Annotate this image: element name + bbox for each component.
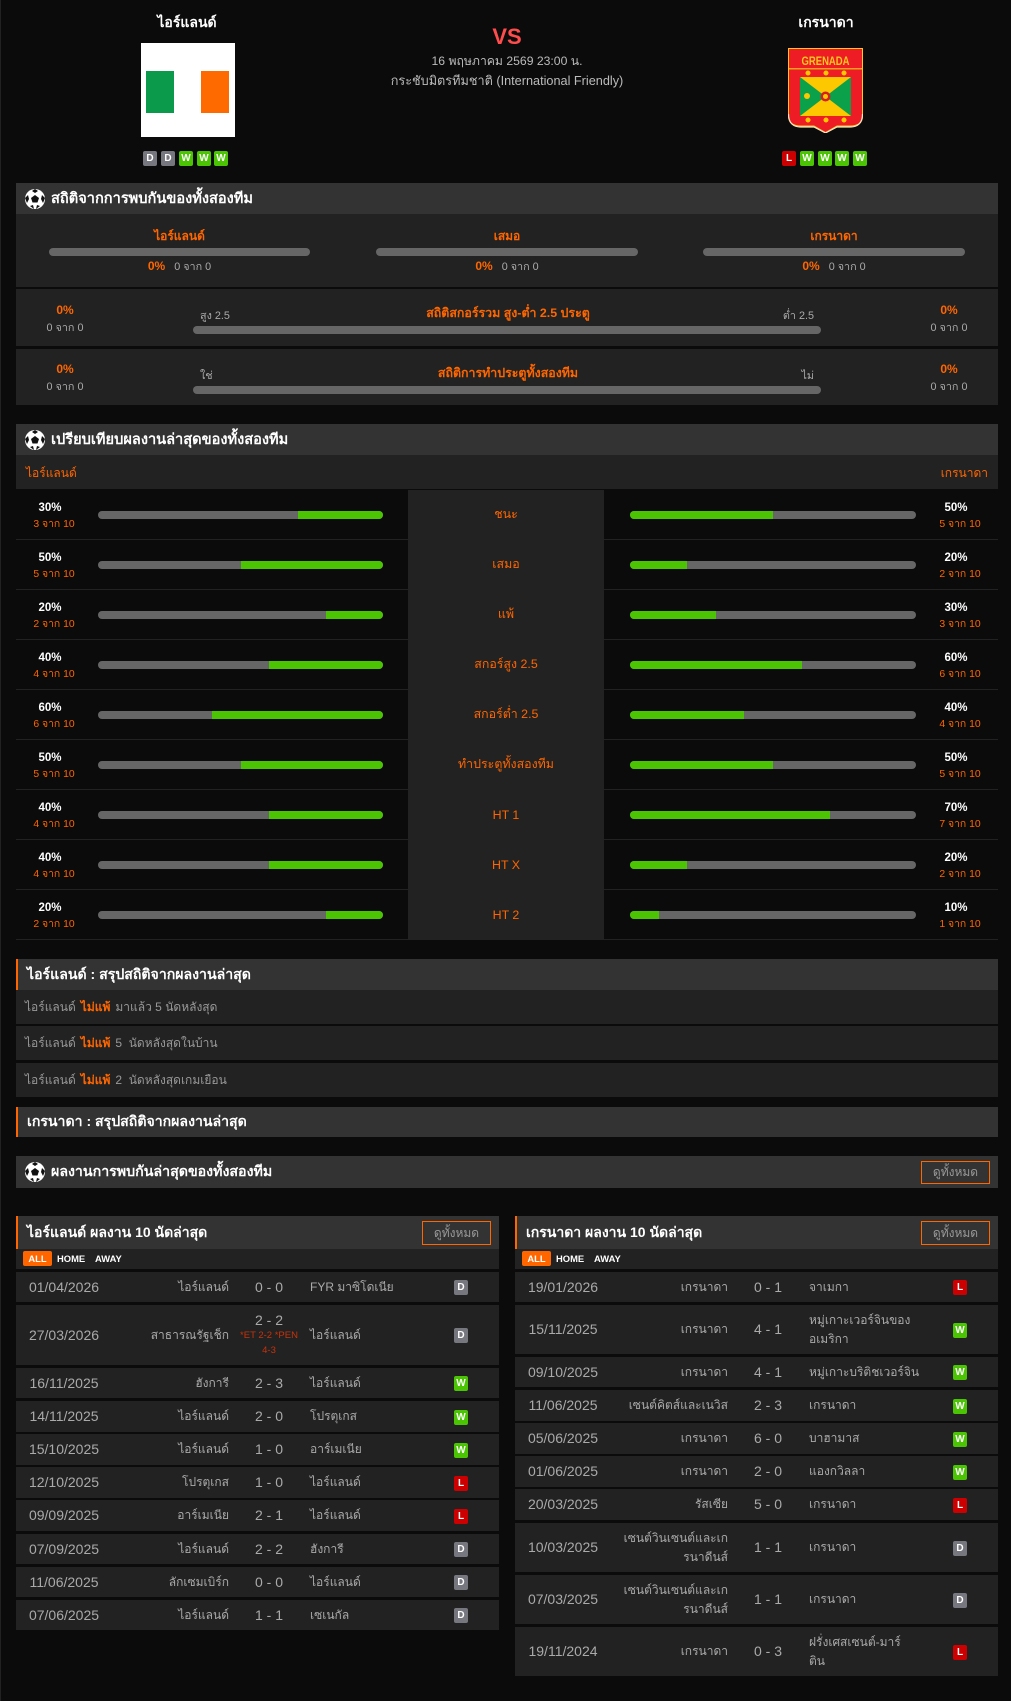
match row: Grenada 7: รัสเซีย xyxy=(695,1497,728,1511)
match row: Grenada 2: W xyxy=(955,1324,965,1336)
comparison row: HT 2: HT 2 xyxy=(493,908,519,922)
comparison row: over 2.5: 4 จาก 10 xyxy=(33,669,75,680)
form badges: Ireland xyxy=(143,151,228,166)
match row: Ireland 3: W xyxy=(456,1378,466,1389)
comparison row: HT 1: 7 จาก 10 xyxy=(939,819,981,830)
comparison row: losses: แพ้ xyxy=(498,607,514,621)
heading: recent form comparison: เปรียบเทียบผลงานล่าสุดของทั้งสองทีม xyxy=(51,432,288,448)
match row: Grenada 8: D xyxy=(956,1542,964,1554)
match row: Ireland 10: เซเนกัล xyxy=(310,1608,349,1622)
panel: over under stats: 0% xyxy=(940,303,958,317)
match row: Grenada 4: 11/06/2025 xyxy=(528,1397,598,1413)
panel: both teams to score stats: 0 จาก 0 xyxy=(47,380,83,392)
match row: Ireland 8: ฮังการี xyxy=(310,1542,344,1556)
match row: Grenada 1: L xyxy=(957,1282,963,1293)
comparison row: HT X: 20% xyxy=(944,852,968,864)
match row: Grenada 8: 1 - 1 xyxy=(754,1539,782,1555)
match row: Ireland 1: 0 - 0 xyxy=(255,1278,283,1294)
comparison row: draws: เสมอ xyxy=(492,557,520,571)
comparison row: draws xyxy=(16,540,998,590)
comparison row: draws: 50% xyxy=(38,552,62,564)
button: view all: ดูทั้งหมด xyxy=(434,1226,479,1240)
summary line 1: ไม่แพ้ xyxy=(81,1000,110,1014)
match row: Grenada 10: เกรนาดา xyxy=(681,1644,728,1658)
left edge line xyxy=(0,0,1,1701)
match row: Grenada 2: 4 - 1 xyxy=(754,1321,782,1337)
match row: Grenada 9 xyxy=(515,1575,998,1624)
match row: Grenada 4: เกรนาดา xyxy=(809,1398,856,1412)
comparison row: both teams score: 5 จาก 10 xyxy=(33,769,75,780)
form badges: Grenada xyxy=(782,151,867,166)
comparison row: under 2.5: สกอร์ต่ำ 2.5 xyxy=(474,707,538,721)
icon: soccer ball xyxy=(25,430,45,450)
panel: both teams to score stats: ใช่ xyxy=(200,370,213,382)
comparison row: wins: ชนะ xyxy=(494,507,518,521)
column: draws: เสมอ xyxy=(494,228,520,242)
panel: over under stats xyxy=(16,289,998,346)
match row: Ireland 8: D xyxy=(457,1544,465,1555)
icon: Grenada crest: GRENADA xyxy=(802,56,850,68)
match row: Grenada 2 xyxy=(515,1305,998,1354)
comparison row: over 2.5: 6 จาก 10 xyxy=(939,669,981,680)
match row: Grenada 3: W xyxy=(955,1367,965,1378)
comparison row: under 2.5: 4 จาก 10 xyxy=(939,719,981,730)
match row: Grenada 3: เกรนาดา xyxy=(681,1364,728,1378)
match row: Grenada 7: L xyxy=(957,1500,963,1510)
heading: Grenada last 10: เกรนาดา ผลงาน 10 นัดล่าสุด xyxy=(526,1224,702,1240)
comparison row: over 2.5 xyxy=(16,640,998,690)
column: Grenada wins xyxy=(703,228,965,273)
summary line 3: ไม่แพ้ xyxy=(81,1072,110,1086)
comparison row: under 2.5: 60% xyxy=(38,702,62,714)
team labels row xyxy=(16,455,998,489)
match row: Grenada 4: 2 - 3 xyxy=(754,1397,782,1413)
comparison row: losses: 30% xyxy=(944,602,968,614)
match row: Ireland 6: ไอร์แลนด์ xyxy=(310,1475,361,1489)
match row: Grenada 2: เกรนาดา xyxy=(681,1322,728,1336)
match row: Grenada 9: เซนต์วินเซนต์และเก xyxy=(624,1582,728,1596)
form badges: Ireland: W xyxy=(181,153,191,164)
match row: Grenada 9: 1 - 1 xyxy=(754,1591,782,1607)
form badges: Grenada: W xyxy=(802,153,812,164)
column: draws: 0% xyxy=(475,259,493,273)
match row: Grenada 9: D xyxy=(956,1594,964,1606)
match row: Ireland 2: 27/03/2026 xyxy=(29,1326,99,1342)
match row: Ireland 9: 0 - 0 xyxy=(255,1574,283,1590)
button: view all xyxy=(921,1161,990,1184)
tabs: Ireland filter xyxy=(16,1249,499,1269)
summary line 2 xyxy=(16,1026,998,1060)
match row: Grenada 5 xyxy=(515,1423,998,1454)
match row: Grenada 10: L xyxy=(957,1646,963,1658)
match row: Grenada 1: เกรนาดา xyxy=(681,1280,728,1294)
comparison row: HT 1: 70% xyxy=(944,802,968,814)
form badges: Ireland: D xyxy=(164,153,172,164)
match row: Ireland 2: ไอร์แลนด์ xyxy=(310,1328,361,1342)
column: Grenada wins: 0% xyxy=(802,259,820,273)
match row: Grenada 3: หมู่เกาะบริติชเวอร์จิน xyxy=(809,1364,919,1378)
match row: Ireland 3: 2 - 3 xyxy=(255,1374,283,1390)
heading: head to head stats: สถิติจากการพบกันของทั้งสองทีม xyxy=(51,191,253,207)
match row: Ireland 8: 2 - 2 xyxy=(255,1540,283,1556)
match row: Ireland 2: *ET 2-2 *PEN xyxy=(240,1330,298,1340)
match row: Ireland 3: ฮังการี xyxy=(195,1376,229,1390)
comparison row: wins: 50% xyxy=(944,502,968,514)
tabs: Grenada filter: AWAY xyxy=(594,1253,621,1264)
match row: Ireland 8: ไอร์แลนด์ xyxy=(178,1542,229,1556)
panel: over under stats: ต่ำ 2.5 xyxy=(783,310,814,322)
form badges: Ireland: W xyxy=(199,153,209,164)
comparison row: both teams score: 5 จาก 10 xyxy=(939,769,981,780)
comparison row: HT 1 xyxy=(16,790,998,840)
match row: Grenada 2: หมู่เกาะเวอร์จินของ xyxy=(809,1312,910,1326)
form badges: Grenada: L xyxy=(786,153,792,164)
match row: Ireland 9: ไอร์แลนด์ xyxy=(310,1574,361,1588)
heading: Grenada summary: เกรนาดา : สรุปสถิติจากผลงานล่าสุด xyxy=(27,1113,247,1129)
column: Grenada wins: 0 จาก 0 xyxy=(829,260,866,272)
match row: Grenada 5: เกรนาดา xyxy=(681,1431,728,1445)
match row: Grenada 5: 05/06/2025 xyxy=(528,1430,598,1446)
match row: Grenada 9: เกรนาดา xyxy=(809,1592,856,1606)
comparison row: HT 2: 1 จาก 10 xyxy=(939,919,981,930)
panel: both teams to score stats: 0% xyxy=(56,362,74,376)
comparison row: HT 2: 10% xyxy=(944,902,968,914)
match row: Ireland 7 xyxy=(16,1500,499,1531)
comparison row: losses: 3 จาก 10 xyxy=(939,619,981,630)
panel: over under stats: 0% xyxy=(56,303,74,317)
panel: over under stats: 0 จาก 0 xyxy=(931,322,967,334)
match row: Ireland 4: โปรตุเกส xyxy=(310,1409,357,1423)
comparison row: wins: 30% xyxy=(38,502,62,514)
match row: Ireland 5: W xyxy=(456,1444,466,1456)
match row: Ireland 9 xyxy=(16,1567,499,1597)
comparison row: under 2.5: 40% xyxy=(944,702,968,714)
match row: Ireland 5: 15/10/2025 xyxy=(29,1441,99,1457)
comparison row: both teams score: 50% xyxy=(38,752,62,764)
match row: Grenada 3 xyxy=(515,1357,998,1387)
tabs: Ireland filter: ALL xyxy=(28,1253,47,1264)
match row: Grenada 7: เกรนาดา xyxy=(809,1497,856,1511)
form badges: Grenada: W xyxy=(855,153,865,164)
comparison row: HT 1: 40% xyxy=(38,802,62,814)
comparison row: wins xyxy=(16,490,998,540)
match row: Grenada 1 xyxy=(515,1272,998,1302)
heading: recent form comparison xyxy=(16,424,998,455)
comparison row: over 2.5: สกอร์สูง 2.5 xyxy=(474,657,538,671)
match row: Grenada 7 xyxy=(515,1489,998,1520)
match row: Grenada 10: 0 - 3 xyxy=(754,1643,782,1659)
comparison row: HT X: 4 จาก 10 xyxy=(33,869,75,880)
tabs: Grenada filter xyxy=(515,1249,998,1269)
comparison row: losses: 2 จาก 10 xyxy=(33,619,75,630)
panel: both teams to score stats: สถิติการทำประตูทั้งสองทีม xyxy=(438,366,578,380)
form badges: Ireland: D xyxy=(146,153,154,164)
match row: Ireland 5 xyxy=(16,1434,499,1465)
column: Ireland wins: 0 จาก 0 xyxy=(174,260,211,272)
comparison row: draws: 5 จาก 10 xyxy=(33,569,75,580)
match row: Ireland 6 xyxy=(16,1467,499,1498)
match row: Grenada 5: W xyxy=(955,1434,965,1444)
match row: Ireland 9: ลักเซมเบิร์ก xyxy=(169,1574,229,1588)
tabs: Grenada filter: ALL xyxy=(527,1253,546,1264)
match row: Ireland 1: ไอร์แลนด์ xyxy=(178,1280,229,1294)
match row: Grenada 6: แองกวิลลา xyxy=(809,1464,865,1478)
match row: Grenada 8: 10/03/2025 xyxy=(528,1539,598,1555)
panel: both teams to score stats xyxy=(16,349,998,405)
heading: Ireland last 10 xyxy=(16,1216,499,1249)
tabs: Ireland filter: HOME xyxy=(57,1253,85,1264)
match row: Grenada 1: 0 - 1 xyxy=(754,1278,782,1294)
heading: Ireland last 10: ไอร์แลนด์ ผลงาน 10 นัดล่าสุด xyxy=(27,1224,207,1240)
form badges: Ireland: W xyxy=(216,153,226,164)
panel: head to head results xyxy=(16,214,998,287)
comparison row: both teams score: ทำประตูทั้งสองทีม xyxy=(458,757,554,771)
panel: over under stats: 0 จาก 0 xyxy=(47,322,83,334)
match row: Ireland 10: D xyxy=(457,1610,465,1621)
icon: soccer ball xyxy=(25,1162,45,1182)
team labels row: เกรนาดา xyxy=(941,466,988,480)
match row: Grenada 4: W xyxy=(955,1400,965,1412)
match row: Grenada 10: 19/11/2024 xyxy=(528,1643,598,1659)
icon: soccer ball xyxy=(25,189,45,209)
match row: Ireland 6: 1 - 0 xyxy=(255,1474,283,1490)
match row: Grenada 7: 5 - 0 xyxy=(754,1496,782,1512)
heading: Ireland summary xyxy=(16,959,998,990)
match row: Grenada 6: W xyxy=(955,1466,965,1478)
match row: Ireland 4: 14/11/2025 xyxy=(29,1408,99,1424)
comparison row: HT 1: 4 จาก 10 xyxy=(33,819,75,830)
team labels row: ไอร์แลนด์ xyxy=(26,466,77,480)
summary line 2: ไม่แพ้ xyxy=(81,1036,110,1050)
match row: Ireland 2: D xyxy=(457,1330,465,1341)
match row: Grenada 10: ฝรั่งเศสเซนต์-มาร์ xyxy=(809,1634,901,1648)
column: draws: 0 จาก 0 xyxy=(502,260,539,272)
match row: Grenada 9: รนาดีนส์ xyxy=(683,1602,728,1616)
comparison row: HT X: 2 จาก 10 xyxy=(939,869,981,880)
match row: Ireland 3 xyxy=(16,1368,499,1398)
match row: Grenada 4: เซนต์คิตส์และเนวิส xyxy=(629,1398,728,1412)
match row: Ireland 2: สาธารณรัฐเช็ก xyxy=(151,1328,229,1342)
match row: Grenada 7: 20/03/2025 xyxy=(528,1496,598,1512)
match row: Grenada 8: เซนต์วินเซนต์และเก xyxy=(624,1530,728,1544)
comparison row: losses: 20% xyxy=(38,602,62,614)
tabs: Ireland filter: AWAY xyxy=(95,1253,122,1264)
button: view all xyxy=(422,1221,491,1245)
match row: Ireland 5: อาร์เมเนีย xyxy=(310,1442,362,1456)
comparison row: HT 1: HT 1 xyxy=(493,808,519,822)
match row: Ireland 9: 11/06/2025 xyxy=(29,1574,99,1590)
match row: Grenada 5: 6 - 0 xyxy=(754,1430,782,1446)
comparison row: HT X: HT X xyxy=(492,858,520,872)
button: view all: ดูทั้งหมด xyxy=(933,1165,978,1179)
match row: Ireland 2: 4-3 xyxy=(262,1344,276,1356)
summary line 3: ไอร์แลนด์ 2 นัดหลังสุดเกมเยือน xyxy=(25,1072,227,1086)
summary line 2: ไอร์แลนด์ 5 นัดหลังสุดในบ้าน xyxy=(25,1036,218,1050)
match row: Grenada 1: 19/01/2026 xyxy=(528,1278,598,1294)
icon: Grenada crest xyxy=(788,48,863,133)
match row: Ireland 10: 1 - 1 xyxy=(255,1606,283,1622)
match row: Ireland 7: L xyxy=(458,1510,464,1522)
comparison row: under 2.5: 6 จาก 10 xyxy=(33,719,75,730)
team name: Ireland: ไอร์แลนด์ xyxy=(157,14,217,30)
comparison row: both teams score: 50% xyxy=(944,752,968,764)
match row: Ireland 5: 1 - 0 xyxy=(255,1441,283,1457)
league name: กระชับมิตรทีมชาติ (International Friendly) xyxy=(391,74,623,88)
heading: Grenada last 10 xyxy=(515,1216,998,1249)
tabs: Grenada filter: HOME xyxy=(556,1253,584,1264)
match row: Ireland 6: โปรตุเกส xyxy=(182,1475,229,1489)
match row: Ireland 3: 16/11/2025 xyxy=(29,1374,99,1390)
match row: Ireland 7: 09/09/2025 xyxy=(29,1507,99,1523)
panel: both teams to score stats: ไม่ xyxy=(801,370,814,382)
match row: Ireland 8: 07/09/2025 xyxy=(29,1540,99,1556)
comparison row: draws: 20% xyxy=(944,552,968,564)
match row: Grenada 8 xyxy=(515,1523,998,1572)
heading: recent meetings xyxy=(16,1156,998,1188)
match row: Ireland 1: 01/04/2026 xyxy=(29,1278,99,1294)
match row: Grenada 4 xyxy=(515,1390,998,1421)
match row: Ireland 1: D xyxy=(457,1282,465,1293)
versus label: VS xyxy=(492,24,522,49)
match row: Ireland 3: ไอร์แลนด์ xyxy=(310,1376,361,1390)
icon: Ireland flag xyxy=(141,43,235,137)
column: Ireland wins: ไอร์แลนด์ xyxy=(154,228,205,242)
button: view all: ดูทั้งหมด xyxy=(933,1226,978,1240)
match row: Grenada 8: เกรนาดา xyxy=(809,1540,856,1554)
panel: over under stats: สถิติสกอร์รวม สูง-ต่ำ 2.5 ประตู xyxy=(426,306,590,320)
match row: Grenada 9: 07/03/2025 xyxy=(528,1591,598,1607)
heading: Grenada summary xyxy=(16,1107,998,1137)
match row: Ireland 10 xyxy=(16,1600,499,1630)
match row: Ireland 6: L xyxy=(458,1478,464,1488)
match row: Ireland 10: 07/06/2025 xyxy=(29,1606,99,1622)
comparison row: draws: 2 จาก 10 xyxy=(939,569,981,580)
match row: Grenada 3: 4 - 1 xyxy=(754,1364,782,1380)
comparison row: HT X xyxy=(16,840,998,890)
comparison row: HT 2: 2 จาก 10 xyxy=(33,919,75,930)
match date: 16 พฤษภาคม 2569 23:00 น. xyxy=(432,54,582,68)
match row: Grenada 2: 15/11/2025 xyxy=(528,1321,598,1337)
panel: over under stats: สูง 2.5 xyxy=(200,310,230,322)
column: Grenada wins: เกรนาดา xyxy=(810,228,858,242)
match row: Ireland 7: อาร์เมเนีย xyxy=(177,1508,229,1522)
match row: Ireland 2 xyxy=(16,1305,499,1365)
form badges: Grenada: W xyxy=(837,153,847,164)
match row: Grenada 3: 09/10/2025 xyxy=(528,1364,598,1380)
match row: Ireland 7: ไอร์แลนด์ xyxy=(310,1508,361,1522)
match row: Grenada 6: 2 - 0 xyxy=(754,1463,782,1479)
summary line 3 xyxy=(16,1063,998,1097)
comparison row: over 2.5: 40% xyxy=(38,652,62,664)
match row: Grenada 6: 01/06/2025 xyxy=(528,1463,598,1479)
comparison row: HT X: 40% xyxy=(38,852,62,864)
column: draws xyxy=(376,228,638,273)
match row: Ireland 9: D xyxy=(457,1577,465,1588)
match row: Ireland 1: FYR มาซิโดเนีย xyxy=(310,1280,394,1294)
heading: head to head stats xyxy=(16,183,998,214)
panel: both teams to score stats: 0% xyxy=(940,362,958,376)
match row: Ireland 4: 2 - 0 xyxy=(255,1408,283,1424)
column: Ireland wins xyxy=(49,228,310,273)
comparison row: over 2.5: 60% xyxy=(944,652,968,664)
comparison row: losses xyxy=(16,590,998,640)
match row: Grenada 6 xyxy=(515,1456,998,1487)
button: view all xyxy=(921,1221,990,1245)
match row: Grenada 2: อเมริกา xyxy=(809,1332,849,1346)
match row: Ireland 5: ไอร์แลนด์ xyxy=(178,1442,229,1456)
match row: Ireland 4: W xyxy=(456,1412,466,1422)
heading: Ireland summary: ไอร์แลนด์ : สรุปสถิติจากผลงานล่าสุด xyxy=(27,966,251,982)
summary line 1: ไอร์แลนด์ มาแล้ว 5 นัดหลังสุด xyxy=(25,1000,217,1014)
form badges: Grenada: W xyxy=(820,153,830,164)
match row: Grenada 10 xyxy=(515,1627,998,1676)
match header xyxy=(141,14,867,166)
match row: Grenada 10: ติน xyxy=(809,1654,825,1668)
match row: Ireland 1 xyxy=(16,1272,499,1302)
comparison row: under 2.5 xyxy=(16,690,998,740)
match row: Grenada 8: รนาดีนส์ xyxy=(683,1550,728,1564)
match row: Ireland 7: 2 - 1 xyxy=(255,1507,283,1523)
match row: Grenada 6: เกรนาดา xyxy=(681,1464,728,1478)
comparison row: both teams score xyxy=(16,740,998,790)
match row: Ireland 6: 12/10/2025 xyxy=(29,1474,99,1490)
match row: Ireland 2: 2 - 2 xyxy=(255,1312,283,1328)
match row: Ireland 8 xyxy=(16,1534,499,1564)
match row: Ireland 10: ไอร์แลนด์ xyxy=(178,1608,229,1622)
match row: Grenada 5: บาฮามาส xyxy=(809,1431,859,1445)
match row: Ireland 4: ไอร์แลนด์ xyxy=(178,1409,229,1423)
comparison row: HT 2: 20% xyxy=(38,902,62,914)
comparison row: wins: 3 จาก 10 xyxy=(33,519,75,530)
comparison row: HT 2 xyxy=(16,890,998,940)
comparison row: wins: 5 จาก 10 xyxy=(939,519,981,530)
heading: recent meetings: ผลงานการพบกันล่าสุดของทั้งสองทีม xyxy=(51,1164,272,1180)
match row: Grenada 1: จาเมกา xyxy=(809,1280,849,1294)
column: Ireland wins: 0% xyxy=(148,259,165,273)
team name: Grenada: เกรนาดา xyxy=(798,14,854,30)
summary line 1 xyxy=(16,990,998,1024)
panel: both teams to score stats: 0 จาก 0 xyxy=(931,380,967,392)
match row: Ireland 4 xyxy=(16,1401,499,1432)
